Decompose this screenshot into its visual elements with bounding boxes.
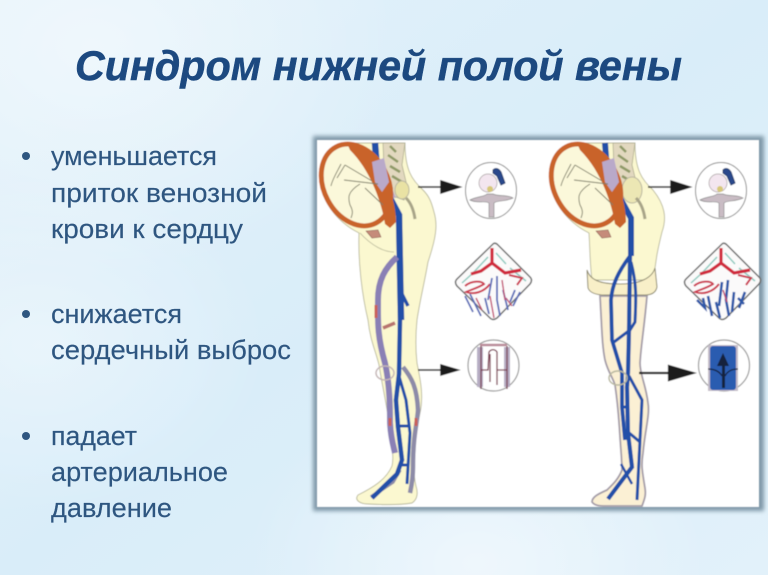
fetus [331,164,383,218]
icon: vessels diamond right [684,243,760,320]
bullet 1: крови к сердцу [51,214,244,244]
knee marker [376,366,394,380]
compression stocking [592,296,648,506]
bullet 2: сердечный выброс [51,335,291,365]
bullet 2: снижается [51,299,182,329]
icon: vertebra right [696,162,746,218]
body outline [550,143,665,280]
knee marker [609,371,627,385]
arrow: top right [648,181,690,193]
title: Синдром нижней полой вены [75,42,682,89]
bullet 1: приток венозной [51,178,267,208]
inferior vena cava [375,143,401,320]
main leg veins [372,320,402,498]
bullet 1: уменьшается [51,141,217,171]
panel shadow [313,136,764,511]
bullet 3: падает [51,421,137,451]
bullet 3: артериальное [51,457,228,487]
right figure: leg with compression [538,132,665,506]
icon: valve right [698,340,750,391]
uterus [538,132,634,238]
body outline [320,143,436,505]
icon: vessels diamond left [456,243,532,320]
bullet 2 [22,299,291,365]
fetus [561,164,613,218]
arrow: top left [418,181,460,193]
arrow: lower right [639,366,693,380]
spine and pelvis [372,143,415,219]
arrow: lower left [418,365,458,375]
uterus [308,132,404,238]
icon: vertebra left [466,162,516,218]
left figure: leg with varicose veins [308,132,436,505]
compression band [587,268,657,295]
bullet 3 [22,421,228,523]
bullet 3: давление [51,493,172,523]
bullet 1 [22,141,267,244]
bullet list [22,141,291,523]
collateral veins [378,257,397,453]
inferior vena cava [605,143,631,256]
panel: illustration [308,132,760,507]
spine and pelvis [602,143,645,219]
icon: valve left [468,340,519,391]
leg veins [611,256,630,440]
